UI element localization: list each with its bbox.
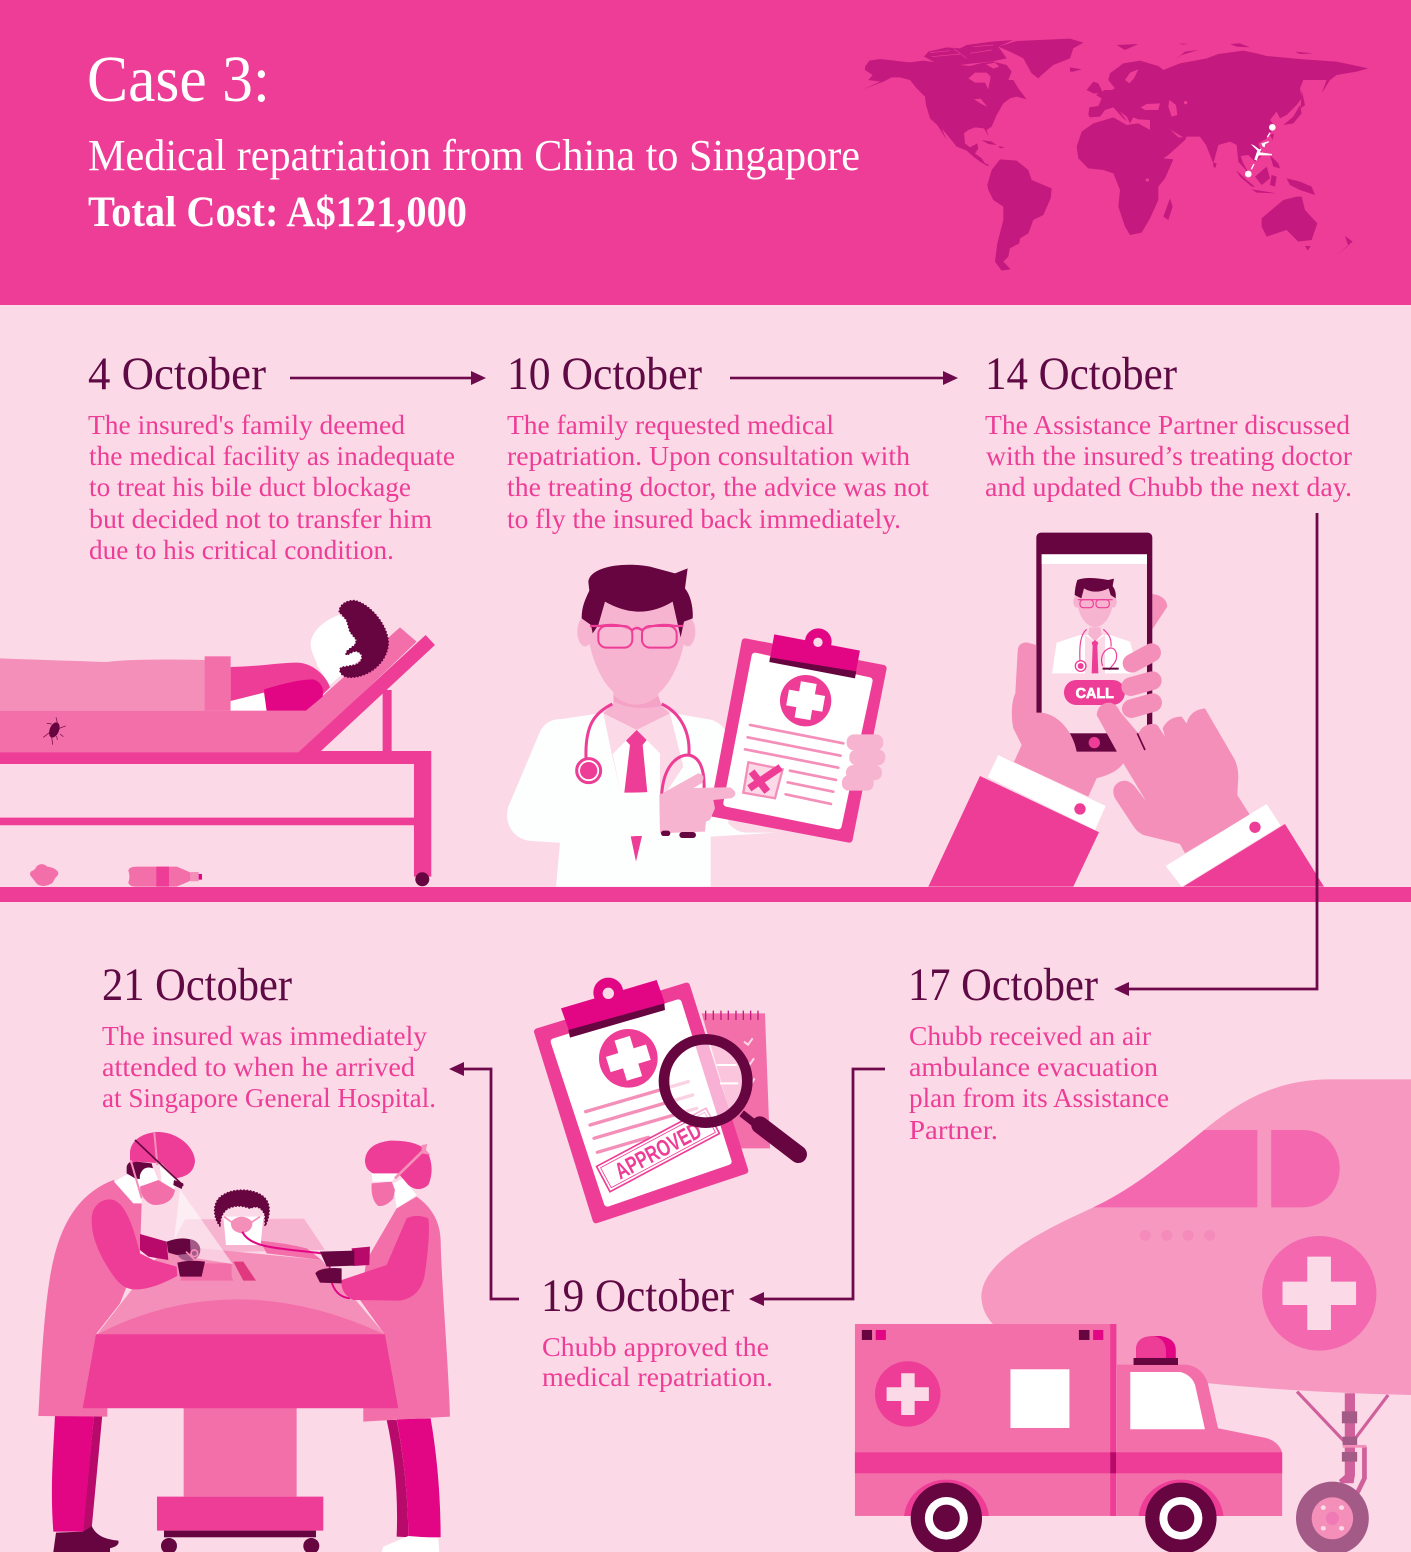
step text — [985, 409, 1352, 502]
step text: to fly the insured back immediately. — [507, 503, 901, 534]
step text — [909, 1020, 1169, 1145]
step text: the treating doctor, the advice was not — [507, 471, 929, 502]
call button — [1064, 680, 1125, 705]
step text: medical repatriation. — [542, 1361, 773, 1392]
right hand — [1097, 703, 1250, 853]
step text: The insured was immediately — [102, 1020, 427, 1051]
step: 17 October — [908, 959, 1169, 1145]
illustration: doctor with clipboard — [507, 565, 885, 887]
approved stamp: APPROVED — [610, 1117, 706, 1184]
connector: 17 to 19 October — [749, 1069, 885, 1306]
right surgeon head — [365, 1141, 432, 1208]
left surgeon gown — [38, 1180, 142, 1417]
icon: cockroach — [43, 717, 66, 745]
left hand — [998, 642, 1153, 797]
patient head — [215, 1190, 350, 1298]
timeline arrow: 10 to 14 October — [730, 371, 958, 385]
landing gear — [1296, 1392, 1388, 1552]
step text: but decided not to transfer him — [89, 503, 432, 534]
step text: the medical facility as inadequate — [89, 440, 455, 471]
left surgeon legs — [52, 1415, 119, 1552]
step: 19 October — [541, 1270, 773, 1392]
connector: 19 to 21 October — [449, 1062, 519, 1299]
illustration: surgery — [38, 1132, 450, 1552]
step: 14 October — [985, 348, 1352, 502]
patient head — [311, 601, 388, 685]
illustration: patient on bed — [0, 601, 435, 887]
step: 19 October: 19 October — [541, 1270, 734, 1322]
illustration: approved clipboard and magnifier — [537, 978, 798, 1220]
lamp beam — [174, 1189, 233, 1264]
air ambulance — [981, 1079, 1411, 1395]
step text: to treat his bile duct blockage — [89, 471, 411, 502]
step text: attended to when he arrived — [102, 1051, 415, 1082]
header banner — [0, 0, 1411, 305]
clipboard — [537, 978, 745, 1220]
total cost: Total Cost: A$121,000 — [88, 189, 467, 236]
notepad — [702, 1011, 770, 1148]
left suit sleeve — [928, 755, 1106, 887]
subtitle: Medical repatriation from China to Singapore — [88, 131, 860, 180]
step text: at Singapore General Hospital. — [102, 1082, 436, 1113]
necktie — [624, 730, 647, 793]
left surgeon head — [114, 1132, 195, 1205]
left surgeon arm — [92, 1199, 205, 1289]
step text: Partner. — [909, 1114, 998, 1145]
step: 17 October: 17 October — [908, 959, 1098, 1011]
step text: plan from its Assistance — [909, 1082, 1169, 1113]
world map with route — [863, 39, 1368, 271]
step text — [102, 1020, 436, 1113]
icon: rock — [33, 867, 55, 883]
icon: bottle — [128, 867, 202, 887]
doctor neck and head — [577, 565, 695, 730]
step text: repatriation. Upon consultation with — [507, 440, 910, 471]
step text: The family requested medical — [507, 409, 834, 440]
illustration: plane and ambulance — [855, 1079, 1411, 1552]
step text: ambulance evacuation — [909, 1051, 1158, 1082]
doctor on screen — [1052, 578, 1133, 673]
stethoscope — [577, 704, 704, 795]
ground line — [0, 887, 1411, 902]
call button: CALL — [1076, 686, 1114, 702]
step: 10 October: 10 October — [507, 348, 702, 400]
operating table — [83, 1219, 398, 1552]
step: 21 October: 21 October — [102, 959, 292, 1011]
clipboard — [713, 628, 883, 839]
step: 21 October — [102, 959, 436, 1113]
step text: with the insured’s treating doctor — [986, 440, 1352, 471]
step text: Chubb approved the — [542, 1331, 769, 1362]
step: 4 October — [88, 348, 455, 565]
connector: 14 to 17 October — [1114, 513, 1317, 996]
map: Europe, Africa, Asia, Oceania — [1070, 43, 1368, 255]
step text: Chubb received an air — [909, 1020, 1151, 1051]
right surgeon legs — [382, 1418, 441, 1552]
flight route and plane — [1245, 124, 1276, 177]
timeline arrow: 4 to 10 October — [290, 371, 486, 385]
step text: The insured's family deemed — [88, 409, 405, 440]
step: 14 October: 14 October — [985, 348, 1177, 400]
title: Case 3: — [87, 43, 270, 116]
smartphone — [1036, 533, 1152, 752]
step text: and updated Chubb the next day. — [985, 471, 1352, 502]
step text — [507, 409, 929, 534]
map: Americas — [863, 39, 1083, 271]
ambulance — [855, 1324, 1282, 1552]
step text — [88, 409, 455, 565]
approved stamp — [597, 1108, 719, 1192]
doctor coat — [507, 713, 777, 887]
hands — [659, 734, 885, 833]
step text: The Assistance Partner discussed — [985, 409, 1350, 440]
step text — [542, 1331, 773, 1392]
step: 10 October — [507, 348, 929, 534]
step: 4 October: 4 October — [88, 348, 266, 400]
magnifying glass — [664, 1039, 798, 1154]
right surgeon gown — [360, 1197, 450, 1422]
illustration: hands with smartphone — [928, 533, 1324, 887]
step text: due to his critical condition. — [89, 534, 394, 565]
right suit sleeve — [1166, 804, 1324, 887]
right surgeon arm — [315, 1216, 429, 1301]
